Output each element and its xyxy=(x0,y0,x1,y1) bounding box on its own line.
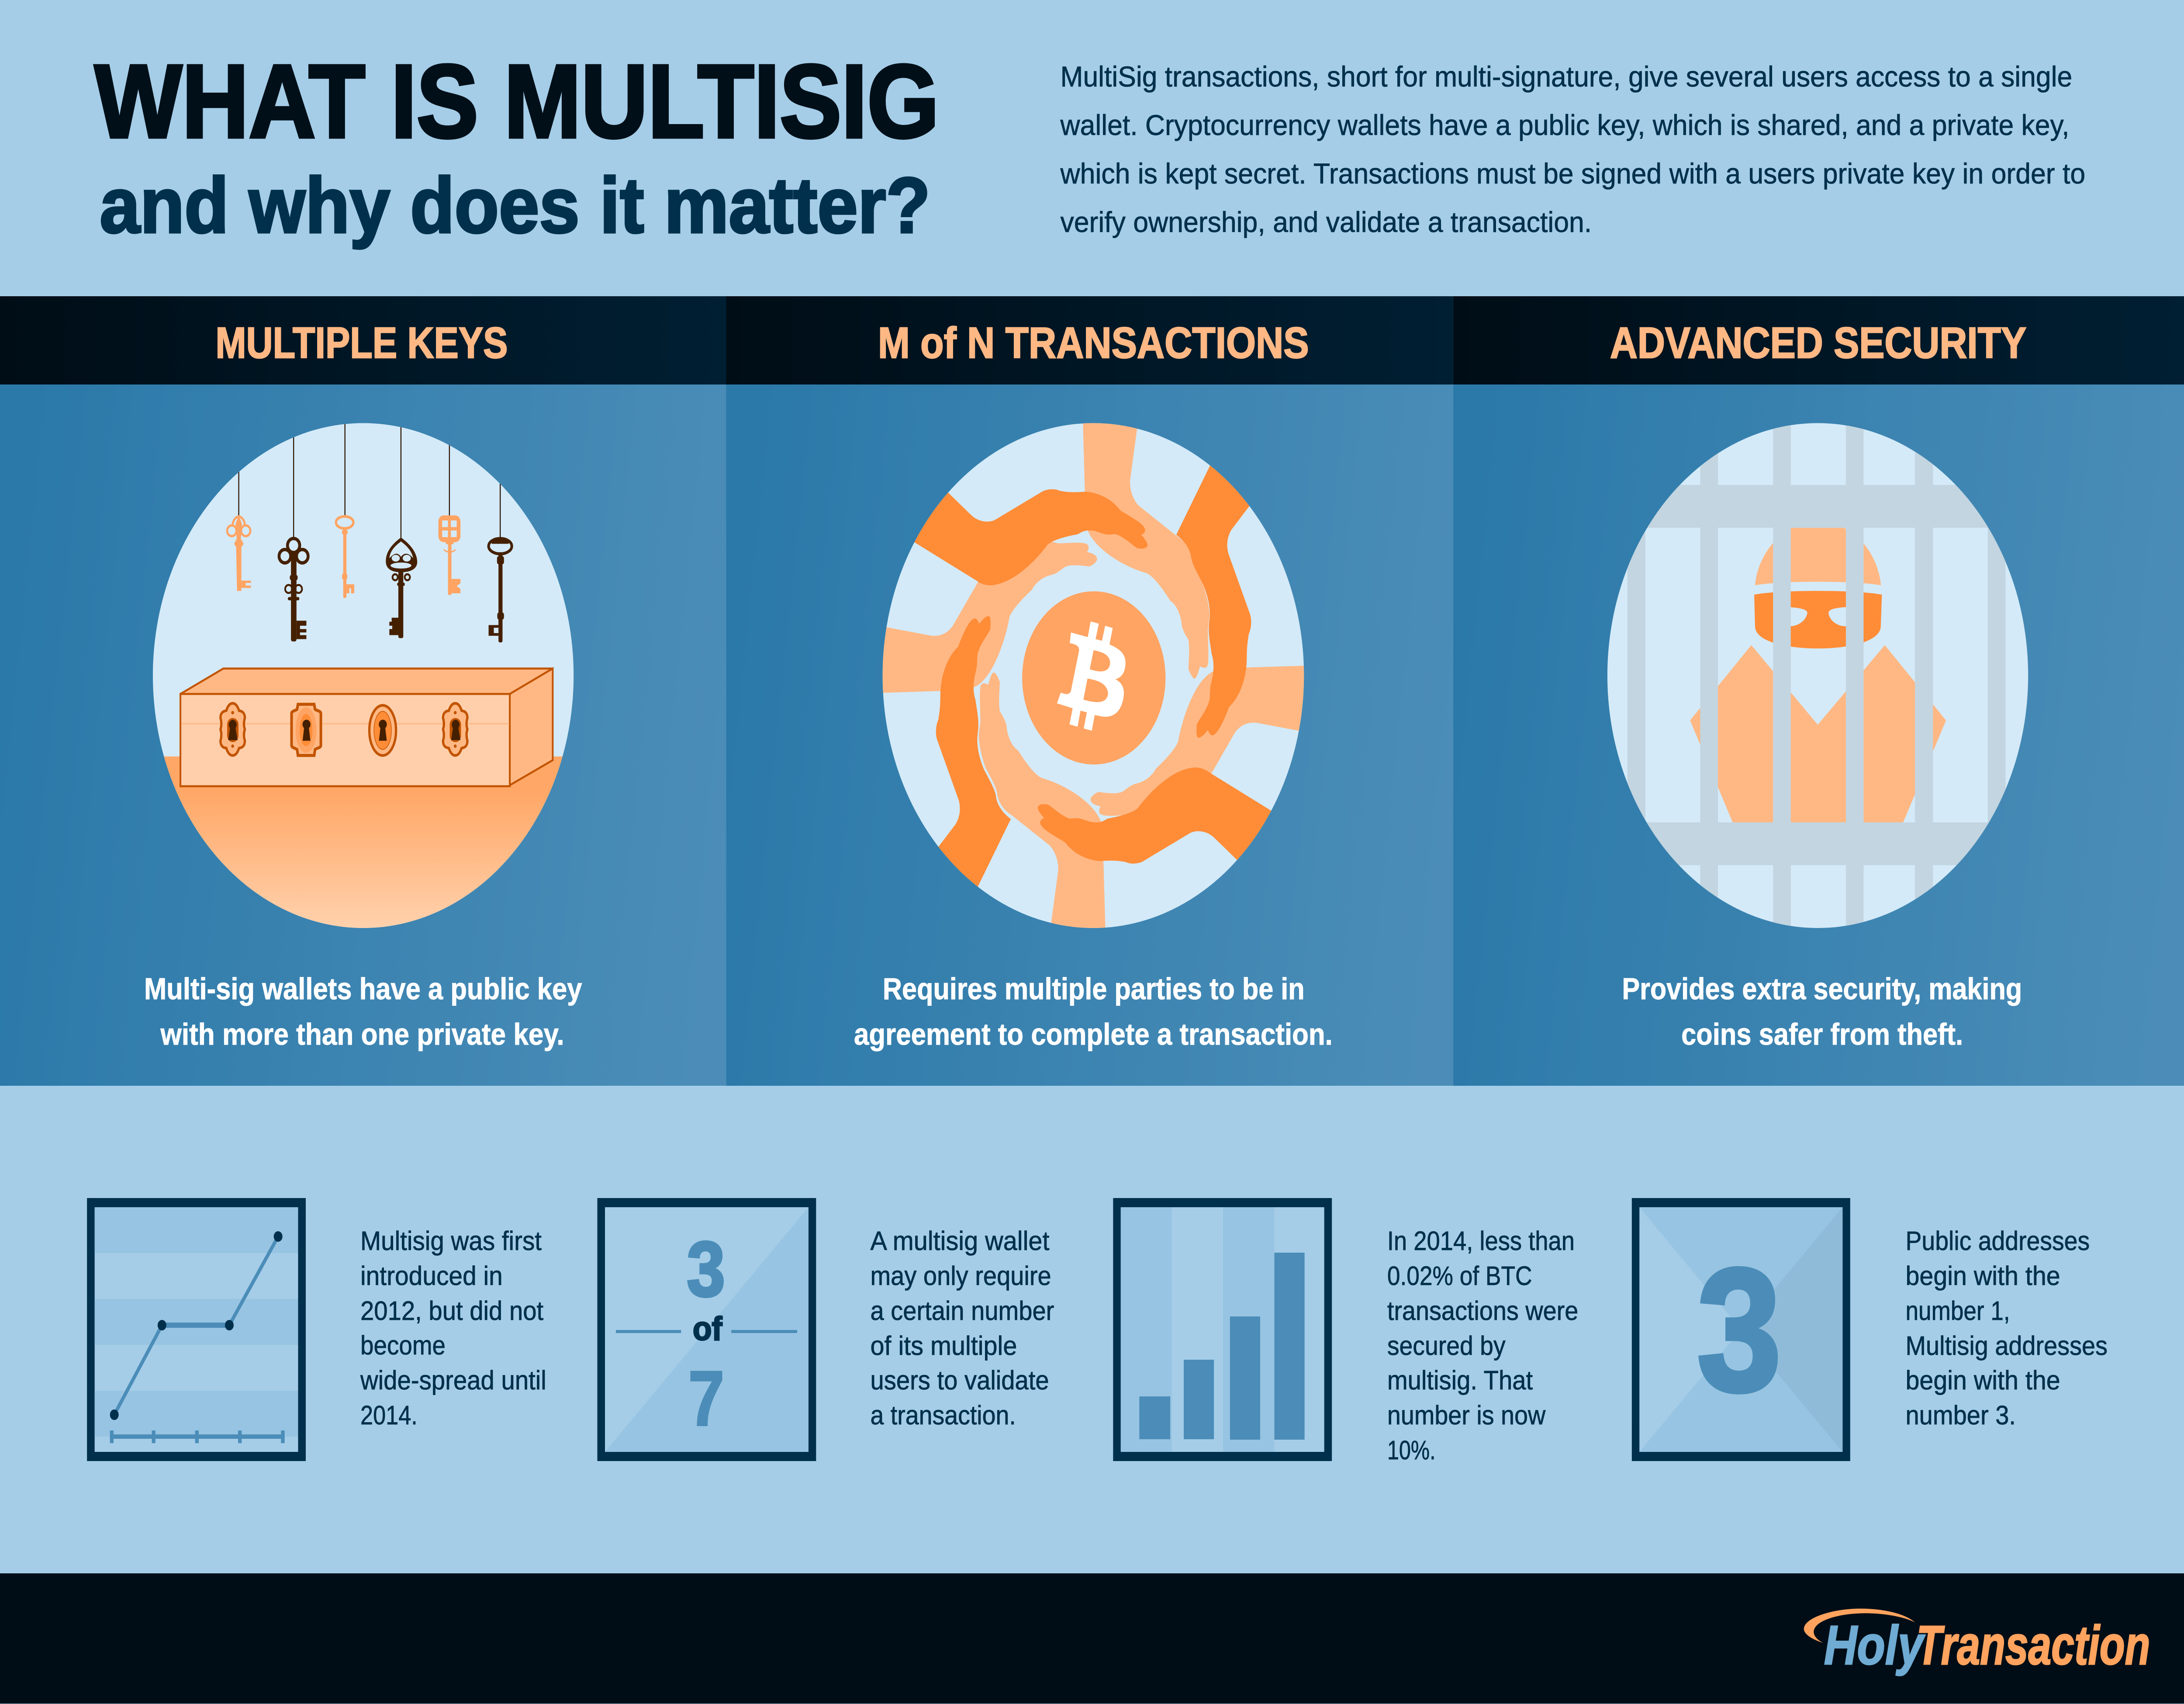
intro paragraph: which is kept secret. Transactions must be signed with a users private key in order to xyxy=(1060,157,2085,190)
title: WHAT IS MULTISIG xyxy=(95,44,939,159)
stat: 3 of 7 icon xyxy=(598,1198,816,1461)
stat: line chart icon xyxy=(87,1198,306,1461)
panel: advanced security xyxy=(1453,296,2184,1086)
caption: Requires multiple parties to be in xyxy=(883,972,1305,1006)
logo: HolyTransaction: Holy xyxy=(1824,1614,1925,1676)
caption: agreement to complete a transaction. xyxy=(854,1017,1333,1051)
stat: number 3 icon: 3 xyxy=(1697,1233,1781,1428)
stat text: adoption: multisig. That xyxy=(1387,1365,1533,1395)
stat text: adoption: secured by xyxy=(1387,1331,1506,1361)
stat text: address prefixes: number 3. xyxy=(1905,1400,2016,1430)
caption xyxy=(1622,972,2022,1051)
logo: HolyTransaction xyxy=(1804,1609,2150,1676)
key 3 xyxy=(336,516,354,598)
stat text: address prefixes: begin with the xyxy=(1905,1261,2060,1291)
illustration: keys and box xyxy=(145,422,581,930)
intro paragraph xyxy=(1060,60,2085,238)
stat text: adoption: number is now xyxy=(1387,1400,1546,1430)
stat text: first introduced: 2014. xyxy=(360,1400,418,1430)
orange hands xyxy=(891,445,1294,909)
caption: with more than one private key. xyxy=(160,1017,564,1051)
panel: multiple keys xyxy=(0,296,726,1086)
key 1 xyxy=(227,516,251,591)
stat text: adoption: 10%. xyxy=(1387,1435,1436,1465)
stat: bar chart icon xyxy=(1113,1198,1332,1461)
title: and why does it matter? xyxy=(100,162,930,249)
panel: m of n transactions xyxy=(726,296,1453,1086)
logo: HolyTransaction: Transaction xyxy=(1917,1614,2150,1676)
stat text: adoption xyxy=(1387,1226,1578,1465)
prison bars xyxy=(1594,415,2047,939)
stat text: first introduced: become xyxy=(360,1330,446,1360)
key 2 xyxy=(279,538,308,641)
intro paragraph: MultiSig transactions, short for multi-signature, give several users access to a single xyxy=(1061,60,2072,93)
illustration: hands around bitcoin xyxy=(879,415,1309,936)
stat text: only require a number: A multisig wallet xyxy=(870,1226,1050,1256)
heading: M of N TRANSACTIONS xyxy=(878,319,1309,367)
caption: Multi-sig wallets have a public key xyxy=(144,972,582,1006)
intro paragraph: verify ownership, and validate a transaction. xyxy=(1061,206,1592,238)
panel background xyxy=(1453,384,2184,1086)
caption xyxy=(144,972,582,1051)
title xyxy=(95,44,939,249)
stat: 3 of 7 icon: 3 xyxy=(687,1226,725,1313)
stat text: only require a number: a certain number xyxy=(870,1296,1054,1326)
key 4 xyxy=(386,537,417,638)
stat text: only require a number: may only require xyxy=(870,1261,1051,1291)
heading band xyxy=(1453,296,2184,384)
stat text: only require a number: a transaction. xyxy=(870,1400,1016,1430)
footer bar xyxy=(0,1573,2184,1704)
stat text: first introduced: Multisig was first xyxy=(360,1226,542,1256)
caption: coins safer from theft. xyxy=(1681,1017,1963,1051)
illustration: robber behind bars xyxy=(1607,423,2028,928)
keyhole plates xyxy=(221,703,467,755)
stat text: only require a number xyxy=(870,1226,1054,1430)
robber xyxy=(1690,528,1946,824)
stat text: adoption: 0.02% of BTC xyxy=(1387,1261,1532,1291)
stat text: only require a number: users to validate xyxy=(870,1365,1049,1395)
stat text: address prefixes: begin with the xyxy=(1905,1365,2060,1395)
stat text: address prefixes: Multisig addresses xyxy=(1905,1331,2108,1361)
stat text: address prefixes xyxy=(1905,1226,2108,1430)
key 6 xyxy=(489,538,512,642)
intro paragraph: wallet. Cryptocurrency wallets have a public key, which is shared, and a private key, xyxy=(1060,109,2070,141)
box xyxy=(180,668,553,786)
heading band xyxy=(0,296,726,384)
light hands xyxy=(879,415,1309,936)
stat: number 3 icon xyxy=(1632,1198,1850,1461)
stat: 3 of 7 icon: 7 xyxy=(688,1355,724,1442)
heading: ADVANCED SECURITY xyxy=(1610,319,2026,367)
caption xyxy=(854,972,1333,1051)
key 5 xyxy=(439,516,460,595)
panel background xyxy=(0,384,726,1086)
stat text: first introduced: introduced in xyxy=(360,1261,503,1291)
stat text: adoption: transactions were xyxy=(1387,1296,1578,1326)
bitcoin coin xyxy=(1022,591,1165,765)
heading: MULTIPLE KEYS xyxy=(215,319,508,367)
heading band xyxy=(726,296,1453,384)
stat: 3 of 7 icon: of xyxy=(693,1310,722,1347)
panel background xyxy=(726,384,1453,1086)
stat text: first introduced xyxy=(360,1226,546,1430)
stat text: address prefixes: Public addresses xyxy=(1905,1226,2090,1256)
caption: Provides extra security, making xyxy=(1622,972,2022,1006)
stat text: only require a number: of its multiple xyxy=(870,1331,1017,1361)
stat text: adoption: In 2014, less than xyxy=(1387,1226,1575,1256)
stat text: address prefixes: number 1, xyxy=(1905,1296,2010,1326)
stat text: first introduced: 2012, but did not xyxy=(360,1296,544,1326)
stat text: first introduced: wide-spread until xyxy=(360,1365,546,1395)
